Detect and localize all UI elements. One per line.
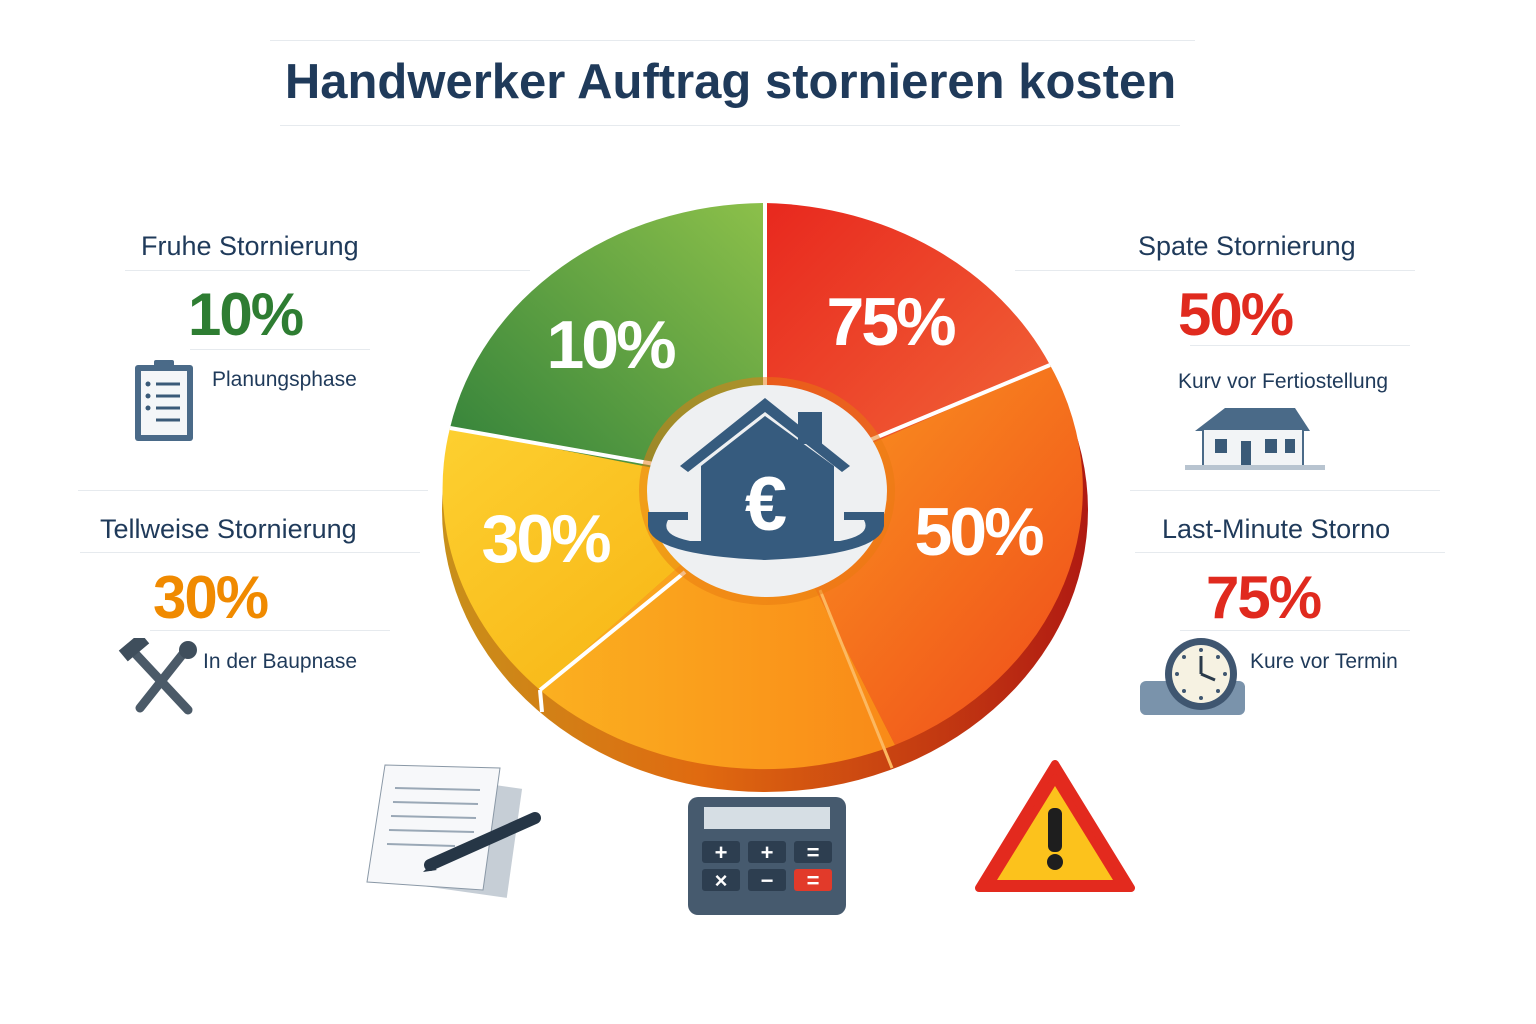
slice labels: 50%	[914, 494, 1043, 570]
slice labels: 10%	[546, 307, 675, 383]
panel: last-minute storno	[1140, 514, 1398, 715]
slice: green 10%	[450, 203, 765, 490]
pie side depth	[442, 228, 1088, 792]
center ring	[639, 377, 895, 605]
percent: 10%	[188, 281, 302, 348]
slice: orange 50%	[765, 365, 1083, 745]
panel: fruhe stornierung	[135, 231, 359, 441]
percent: 50%	[1178, 281, 1292, 348]
icon: warning triangle	[975, 760, 1135, 892]
slice: bottom	[540, 490, 895, 769]
label: In der Baupnase	[203, 650, 357, 673]
heading: Last-Minute Storno	[1162, 514, 1390, 544]
icon: house	[1185, 408, 1325, 470]
slice labels	[481, 284, 1043, 577]
icon: tools	[118, 638, 197, 714]
icon: calculator	[688, 797, 846, 915]
icon: clock	[1140, 638, 1245, 715]
title: Handwerker Auftrag stornieren kosten	[285, 55, 1176, 109]
heading: Spate Stornierung	[1138, 231, 1356, 261]
panel: spate stornierung	[1138, 231, 1388, 470]
icon: calculator: ×	[715, 868, 727, 893]
heading: Fruhe Stornierung	[141, 231, 359, 261]
slice: red 75%	[765, 203, 1050, 490]
pie chart: €	[745, 462, 787, 547]
icon: calculator: =	[807, 868, 819, 893]
label: Kurv vor Fertiostellung	[1178, 370, 1388, 393]
percent: 75%	[1206, 564, 1320, 631]
label: Kure vor Termin	[1250, 650, 1398, 673]
icon: calculator: =	[807, 840, 819, 865]
percent: 30%	[153, 564, 267, 631]
icon: calculator: −	[761, 868, 773, 893]
slice labels: 75%	[826, 284, 955, 360]
icon: document with pen	[366, 764, 541, 898]
label: Planungsphase	[212, 368, 357, 391]
panel: teilweise stornierung	[100, 514, 357, 714]
slice: yellow 30%	[443, 428, 765, 690]
icon: house with euro	[648, 398, 884, 560]
icon: calculator: +	[715, 840, 727, 865]
slice labels: 30%	[481, 501, 610, 577]
icon: calculator: +	[761, 840, 773, 865]
icon: clipboard	[135, 360, 193, 441]
heading: Tellweise Stornierung	[100, 514, 357, 544]
